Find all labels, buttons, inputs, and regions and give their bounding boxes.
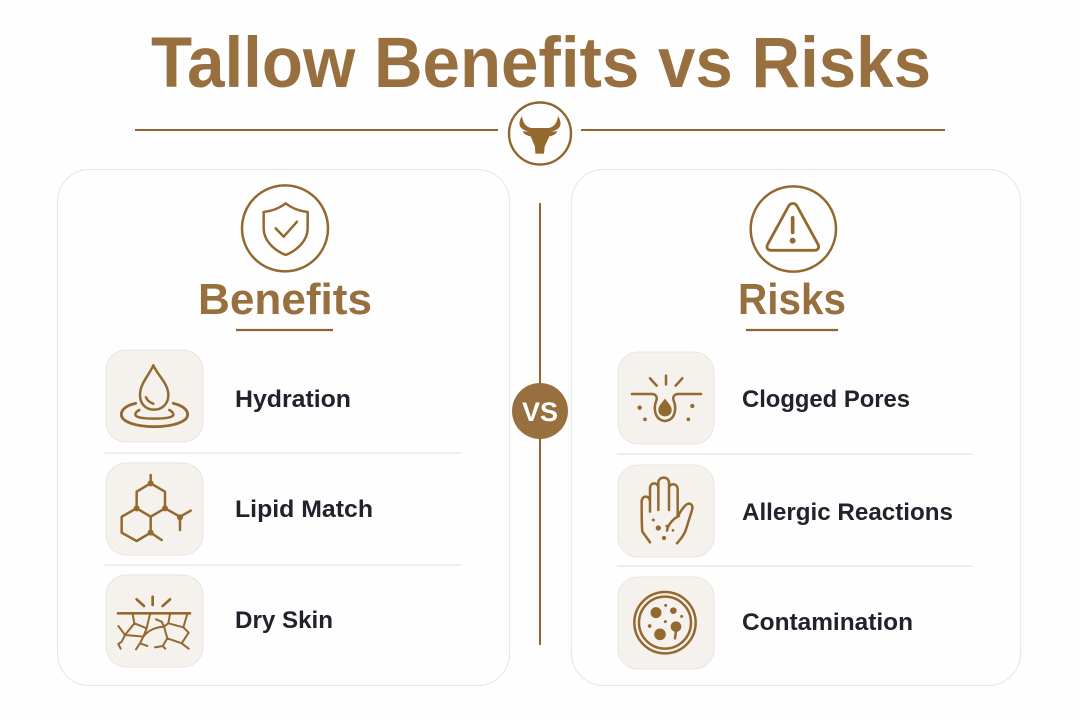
center divider xyxy=(539,203,541,645)
icon: hand with rash xyxy=(642,478,692,543)
icon: molecule xyxy=(122,475,191,541)
label: clogged pores: Clogged Pores xyxy=(742,386,910,413)
label: allergic reactions: Allergic Reactions xyxy=(742,499,953,526)
heading underline: benefits xyxy=(236,329,333,331)
label: lipid match: Lipid Match xyxy=(235,496,373,523)
icon: clogged pore xyxy=(632,376,701,421)
panel: benefits xyxy=(58,170,510,686)
label: contamination: Contamination xyxy=(742,609,913,636)
icon: petri dish xyxy=(634,592,696,653)
icon: shield with check xyxy=(242,185,328,271)
heading: benefits: Benefits xyxy=(198,275,372,324)
vs badge: VS xyxy=(522,397,558,427)
icon: water drop xyxy=(121,365,188,427)
heading: risks: Risks xyxy=(738,275,846,324)
vs badge xyxy=(512,383,568,439)
label: hydration: Hydration xyxy=(235,386,351,413)
header divider with bull icon xyxy=(135,102,945,164)
row: lipid match xyxy=(106,463,373,555)
icon: warning triangle xyxy=(751,186,836,272)
heading underline: risks xyxy=(746,329,838,331)
icon: cracked skin xyxy=(118,597,190,649)
panel: risks xyxy=(572,170,1020,686)
label: dry skin: Dry Skin xyxy=(235,607,333,634)
row: hydration xyxy=(106,350,351,442)
row: contamination xyxy=(618,577,913,669)
row: allergic reactions xyxy=(618,465,953,557)
row: dry skin xyxy=(106,575,333,667)
row: clogged pores xyxy=(618,352,910,444)
title: Tallow Benefits vs Risks xyxy=(151,24,931,103)
